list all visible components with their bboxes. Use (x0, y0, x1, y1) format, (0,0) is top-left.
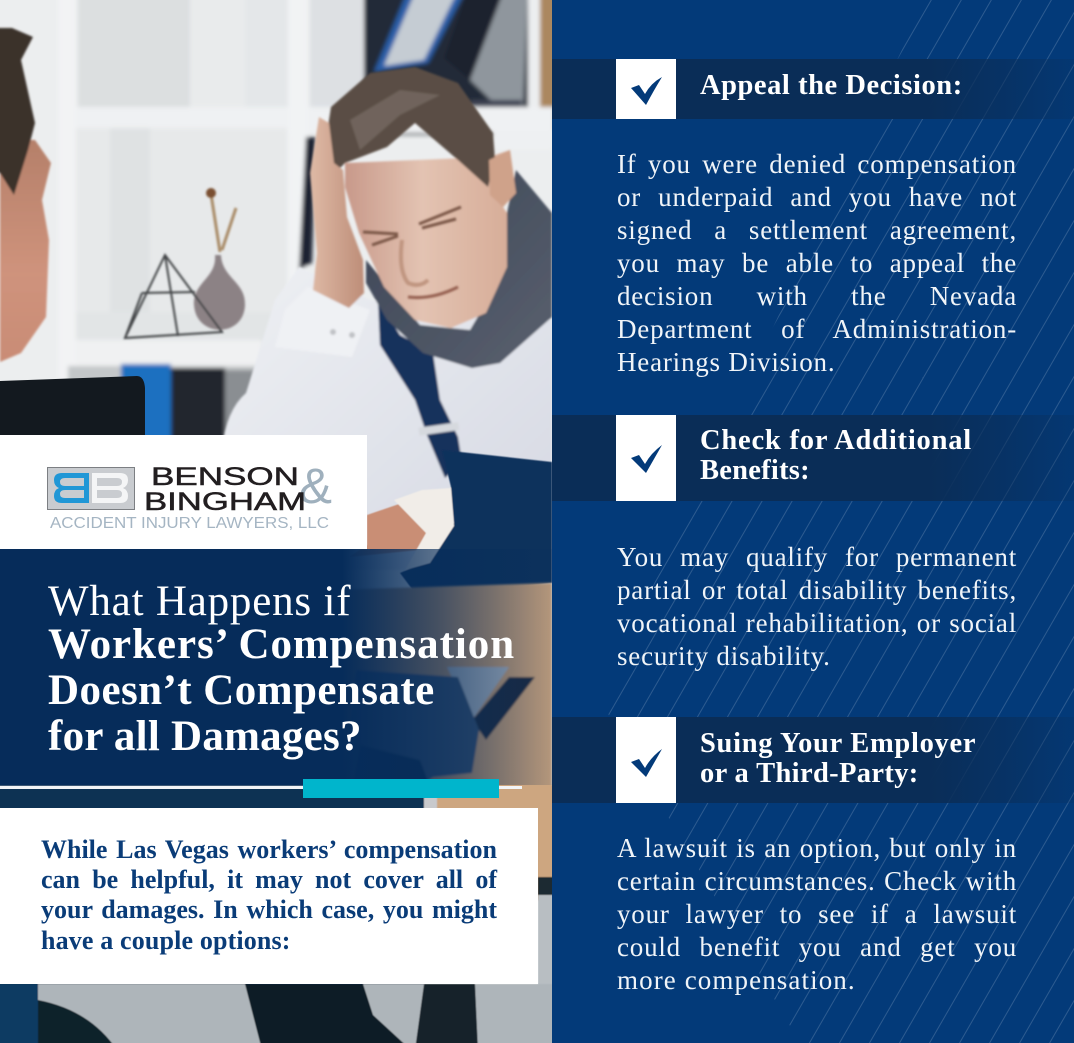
heading: Check for Additional Benefits (700, 425, 972, 486)
text: appeal body: you may be able to appeal the (617, 248, 1017, 278)
heading: Check for Additional Benefits: Check for Additional (700, 425, 972, 456)
sling and bandaged arm (349, 450, 552, 593)
text: lawsuit body: A lawsuit is an option, but only in (617, 833, 1017, 863)
text: benefits body: vocational rehabilitation, or social (617, 608, 1017, 638)
text: appeal body: decision with the Nevada (617, 281, 1017, 311)
left person in foreground (0, 28, 51, 362)
panel: intro text box: have a couple options: (41, 926, 291, 955)
text: lawsuit body: could benefit you and get you (617, 932, 1017, 962)
laptop (0, 376, 145, 440)
title (48, 578, 515, 760)
text: appeal body: or underpaid and you have not (617, 182, 1017, 212)
panel: intro text box: While Las Vegas workers’ compensation (41, 835, 497, 864)
icon: check 2 (616, 415, 676, 501)
text: lawsuit body: more compensation. (617, 965, 856, 995)
man: shirt, brace, head and hand (222, 67, 552, 570)
panel: intro text box: your damages. In which case, you might (41, 895, 497, 924)
text: lawsuit body (617, 833, 1017, 995)
text: appeal body: Hearings Division. (617, 347, 835, 377)
text: benefits body: partial or total disability benefits, (617, 575, 1017, 605)
icon: check 3 (616, 717, 676, 803)
text: lawsuit body: your lawyer to see if a lawsuit (617, 899, 1017, 929)
logo: Benson & Bingham Accident Injury Lawyers: BINGHAM (144, 488, 306, 516)
desk and notepad (330, 583, 552, 900)
heading: Suing Your Employer or a Third-Party: Suing Your Employer (700, 728, 976, 759)
lower desk area (0, 785, 558, 1043)
logo: Benson & Bingham Accident Injury Lawyers: BENSON (151, 463, 299, 491)
text: appeal body: If you were denied compensation (617, 149, 1017, 179)
logo: Benson & Bingham Accident Injury Lawyers (47, 458, 332, 532)
title: What Happens if (48, 578, 351, 625)
section bar: Check for Additional Benefits (552, 415, 1074, 501)
divider line with teal accent (0, 779, 522, 798)
logo: Benson & Bingham Accident Injury Lawyers: & (299, 458, 332, 514)
text: appeal body: signed a settlement agreement, (617, 215, 1017, 245)
man: facial features (363, 207, 461, 298)
text: appeal body (617, 149, 1017, 377)
panel: right blue background with diagonal lines (608, 0, 1074, 1043)
text: benefits body: You may qualify for permanent (617, 542, 1017, 572)
heading: Check for Additional Benefits: Benefits: (700, 455, 810, 486)
heading: Suing Your Employer or a Third-Party: or a Third-Party: (700, 758, 919, 789)
text: lawsuit body: certain circumstances. Check with (617, 866, 1017, 896)
section bar: Appeal the Decision (552, 59, 1074, 119)
heading: Appeal the Decision: Appeal the Decision: (700, 70, 963, 101)
panel: navy title overlay (0, 549, 552, 785)
icon: check 1 (616, 59, 676, 119)
panel: intro text box: can be helpful, it may not cover all of (41, 865, 497, 894)
title: Workers’ Compensation (48, 621, 515, 668)
text: benefits body (617, 542, 1017, 671)
section bar: Suing Your Employer (552, 717, 1074, 803)
shelves and binders (58, 0, 556, 444)
title: for all Damages? (48, 713, 362, 760)
heading: Suing Your Employer or a Third-Party (700, 728, 976, 789)
panel: intro text box (0, 808, 538, 984)
text: appeal body: Department of Administration- (617, 314, 1017, 344)
text: benefits body: security disability. (617, 641, 831, 671)
photo: injured man with neck brace at a lawyer's desk (0, 0, 552, 1043)
icon: dried flowers, vase and wire pyramid (125, 188, 245, 338)
panel: logo box (0, 435, 367, 549)
logo: Benson & Bingham Accident Injury Lawyers: ACCIDENT INJURY LAWYERS, LLC (50, 515, 329, 532)
title: Doesn’t Compensate (48, 667, 435, 714)
